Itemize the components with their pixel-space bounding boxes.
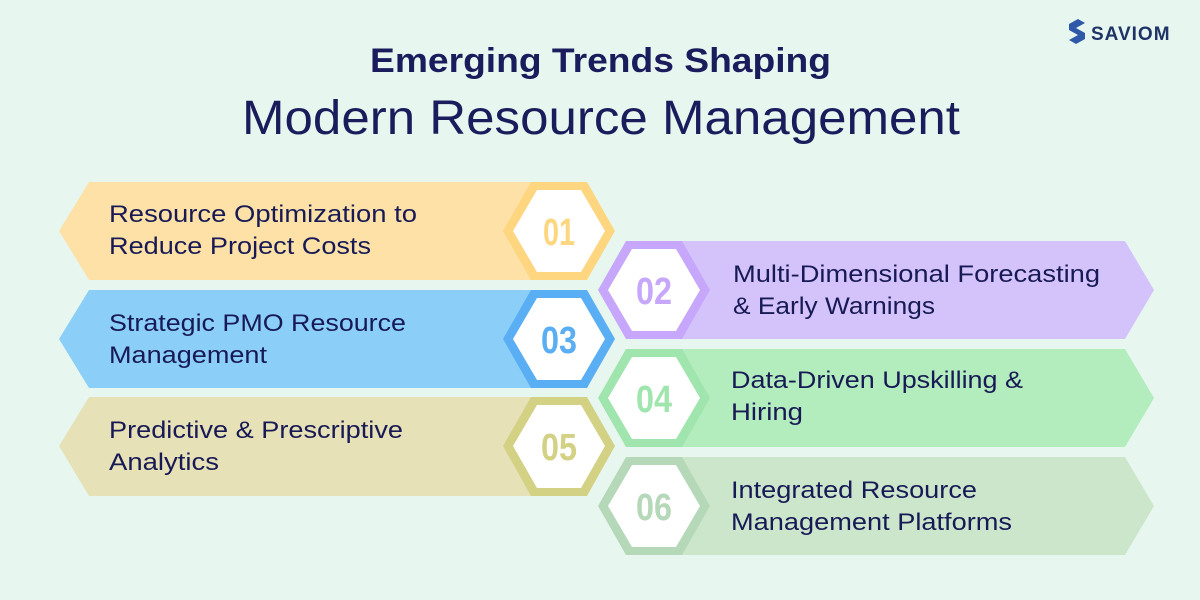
title: Emerging Trends Shaping bbox=[370, 42, 831, 80]
panel 04: Hiring bbox=[731, 399, 803, 426]
panel 06: Integrated Resource bbox=[731, 477, 977, 504]
panel 01: Reduce Project Costs bbox=[109, 233, 371, 260]
panel 01: Resource Optimization to bbox=[109, 201, 417, 228]
panel 06: 06 bbox=[636, 487, 672, 529]
panel 03 bbox=[59, 290, 615, 388]
panel 02: 02 bbox=[636, 271, 672, 313]
panel 04 bbox=[598, 349, 1154, 447]
title: Modern Resource Management bbox=[242, 92, 960, 145]
panel 03: Management bbox=[109, 342, 267, 369]
panel 06: Management Platforms bbox=[731, 509, 1012, 536]
panel 02: & Early Warnings bbox=[733, 293, 935, 320]
panel 02: Multi-Dimensional Forecasting bbox=[733, 261, 1100, 288]
panel 01 bbox=[59, 182, 615, 280]
panel 05: 05 bbox=[541, 427, 577, 469]
title bbox=[242, 42, 960, 145]
panel 03: Strategic PMO Resource bbox=[109, 310, 406, 337]
panel 06 bbox=[598, 457, 1154, 555]
logo: SAVIOM bbox=[1091, 24, 1171, 45]
panel 05: Analytics bbox=[109, 449, 219, 476]
panel 04: Data-Driven Upskilling & bbox=[731, 367, 1023, 394]
logo bbox=[1069, 19, 1171, 45]
panel 01: 01 bbox=[543, 212, 575, 254]
panel 04: 04 bbox=[636, 379, 672, 421]
panel 05: Predictive & Prescriptive bbox=[109, 417, 403, 444]
panel 05 bbox=[59, 397, 615, 496]
panel 03: 03 bbox=[541, 320, 577, 362]
panel 02 bbox=[598, 241, 1154, 339]
